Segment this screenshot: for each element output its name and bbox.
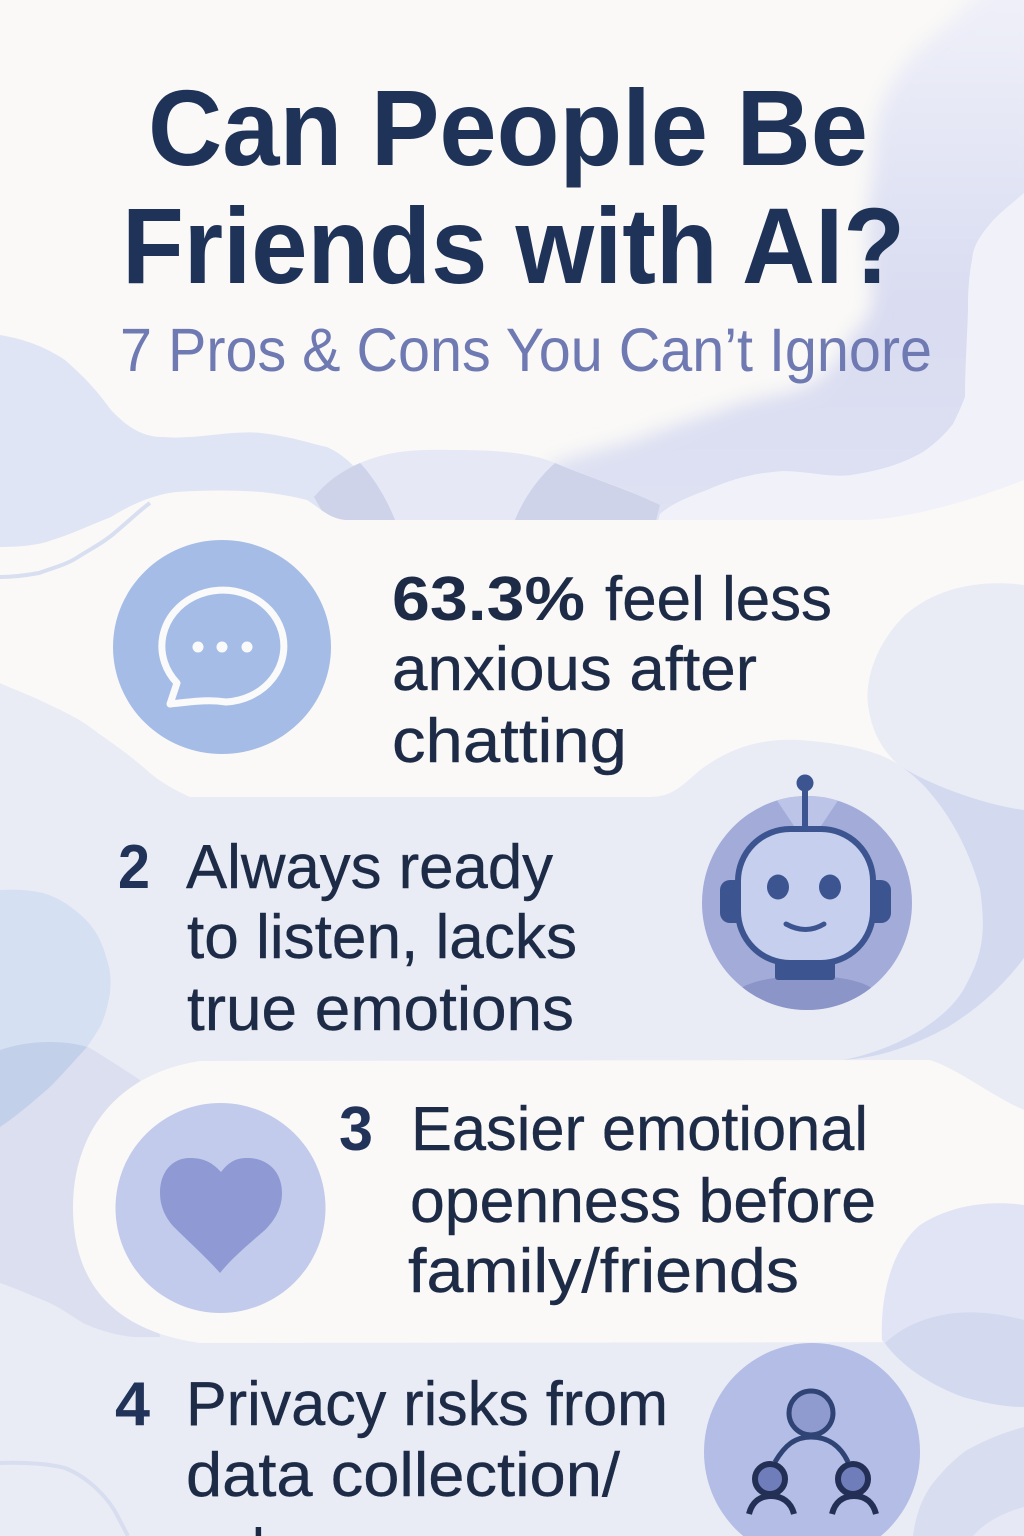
text: item 4: Privacy risks from (186, 1370, 668, 1439)
background blobs: header (0, 0, 1024, 560)
panel 1: white band (0, 480, 1024, 830)
icon: heart (116, 1103, 326, 1313)
text: item 2: true emotions (187, 975, 574, 1044)
title (122, 67, 905, 306)
text: item 1 (392, 565, 832, 776)
panel 2: lavender band (0, 740, 982, 1060)
text: item 3 (339, 1095, 876, 1306)
background blob: bottom right (913, 1427, 1024, 1536)
background blob: right of panel 3 (882, 1203, 1024, 1407)
text: item 3: 3 (339, 1095, 373, 1164)
text: item 3: Easier emotional (411, 1095, 868, 1164)
text: item 2 (118, 833, 577, 1044)
text: item 4: data collection/ (186, 1441, 621, 1510)
text: item 1: chatting (392, 707, 627, 776)
text: item 2: 2 (118, 833, 150, 902)
text: item 4 (115, 1370, 668, 1536)
subtitle: 7 Pros & Cons You Can’t Ignore (120, 316, 932, 384)
background: lower lavender field (0, 683, 1024, 1536)
thin curve by panel 1 (0, 503, 150, 577)
text: item 1: feel less (605, 565, 832, 634)
panel 3: white band (73, 1060, 1024, 1343)
background blobs: left side (0, 890, 160, 1337)
text: item 1: anxious after (392, 635, 757, 704)
text: item 3: openness before (410, 1167, 876, 1236)
text: item 3: family/friends (408, 1237, 799, 1306)
icon: robot (700, 774, 915, 1020)
text: item 2: to listen, lacks (187, 903, 577, 972)
text: item 2: Always ready (186, 833, 553, 902)
icon: chat bubble (113, 540, 331, 754)
title: Friends with AI? (122, 185, 905, 306)
icon: people network (704, 1343, 920, 1536)
background blob: right of panel 1 (867, 583, 1024, 830)
title: Can People Be (148, 67, 868, 188)
background curve: bottom left (0, 1463, 128, 1536)
text: item 1: 63.3% (392, 565, 585, 634)
background blob: right crescent (843, 767, 1024, 1060)
text: item 4: 4 (115, 1370, 151, 1439)
